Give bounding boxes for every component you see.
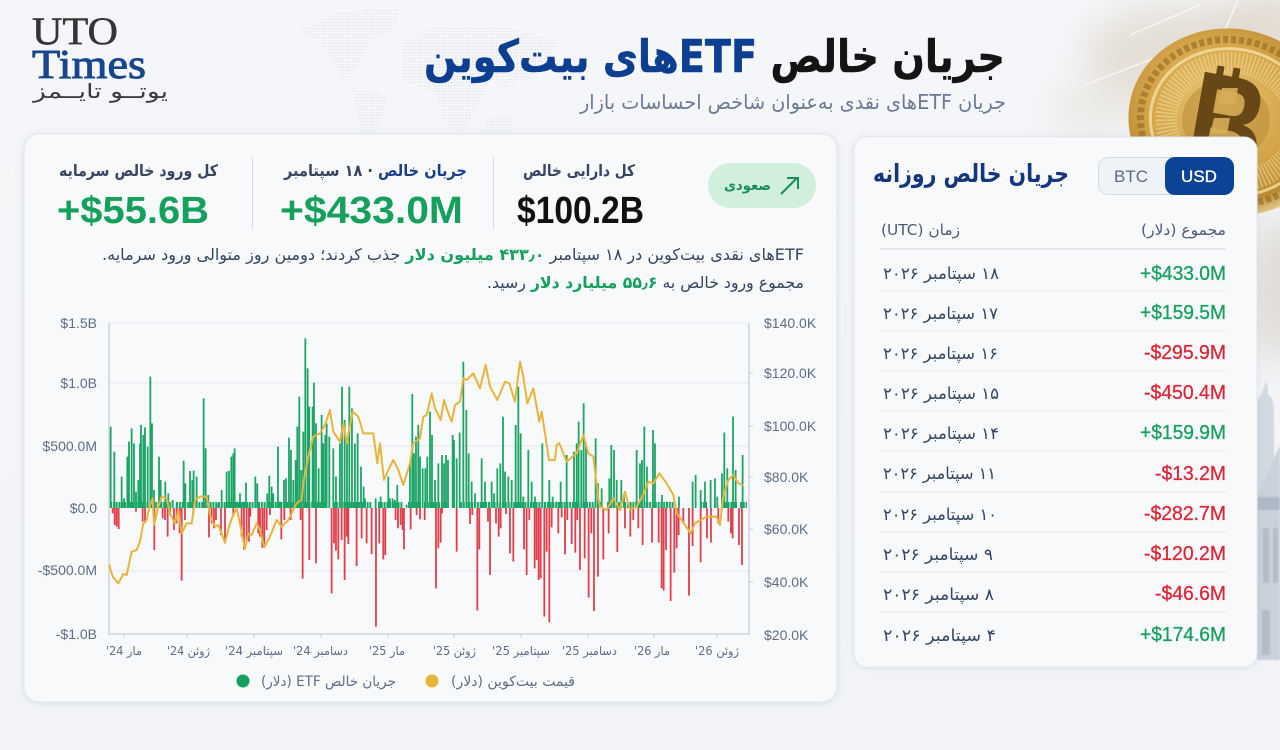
table header [880, 221, 1226, 249]
left axis labels: -$1.0B [56, 626, 97, 642]
row: 17 September: ۱۷ سپتامبر ۲۰۲۶ [883, 304, 998, 324]
row: 9 September: -$120.2M [1144, 543, 1226, 565]
background: world map [300, 8, 560, 146]
stat: total net assets [517, 161, 644, 232]
x axis labels: ژوئن ‎'25 [433, 644, 476, 659]
row: 11 September: ۱۱ سپتامبر ۲۰۲۶ [883, 464, 996, 484]
row: 16 September: ۱۶ سپتامبر ۲۰۲۶ [883, 344, 998, 364]
logo: UTO [32, 10, 118, 53]
toggle: currency: BTC [1114, 167, 1148, 186]
stat: total net inflow [57, 161, 219, 232]
row: 8 September: -$46.6M [1155, 583, 1226, 605]
right axis labels: $100.0K [764, 418, 817, 434]
row: 4 September: +$174.6M [1140, 624, 1226, 646]
description text: مجموع ورود خالص به ۵۵٫۶ میلیارد دلار رسید. [487, 273, 804, 293]
left axis labels [38, 315, 97, 642]
right axis labels: $60.0K [764, 521, 809, 537]
x axis labels: مار ‎'26 [634, 644, 670, 659]
row: 16 September: -$295.9M [1144, 342, 1226, 364]
bitcoin price line [109, 362, 743, 583]
row: 8 September: ۸ سپتامبر ۲۰۲۶ [883, 585, 994, 605]
red outflow bars [113, 508, 742, 627]
title: جریان خالص ETFهای بیت‌کوین [424, 30, 1005, 83]
background: marble texture [1050, 0, 1280, 365]
green inflow bars [110, 338, 747, 508]
row: 9 September: ۹ سپتامبر ۲۰۲۶ [883, 545, 993, 565]
stat: total net assets: $100.2B [517, 190, 644, 232]
row: 4 September [883, 624, 1226, 646]
row: 15 September [883, 382, 1226, 404]
left axis labels: $0.0 [70, 500, 97, 516]
row: 14 September [883, 422, 1226, 444]
right axis labels: $20.0K [764, 627, 809, 643]
x axis labels: دسامبر ‎'25 [562, 644, 617, 659]
row: 8 September [883, 583, 1226, 605]
row: 17 September [883, 302, 1226, 324]
table header: زمان (UTC) [881, 221, 960, 239]
description text [102, 245, 804, 293]
x axis labels: ژوئن ‎'26 [695, 644, 739, 659]
logo: یوتــو تایــمز [32, 79, 168, 103]
stat: net flow 18 September: جریان خالص · ۱۸ سپتامبر [283, 161, 467, 181]
left axis labels: $1.0B [60, 375, 97, 391]
right axis labels: $120.0K [764, 365, 817, 381]
x axis labels: مار ‎'24 [106, 644, 142, 659]
x axis labels: سپتامبر ‎'25 [492, 644, 550, 659]
table header: مجموع (دلار) [1141, 221, 1226, 239]
row: 17 September: +$159.5M [1140, 302, 1226, 324]
row: 18 September [883, 263, 1226, 285]
left axis labels: $500.0M [43, 438, 97, 454]
row: 16 September [883, 342, 1226, 364]
left axis labels: -$500.0M [38, 562, 97, 578]
logo: Times [32, 41, 146, 87]
chart: ETF net flow and bitcoin price [38, 315, 817, 659]
stat: net flow 18 September [280, 161, 467, 232]
row: 11 September [883, 463, 1226, 485]
right axis labels [764, 315, 817, 643]
badge: bullish: صعودی [724, 178, 771, 194]
chart legend [236, 674, 575, 690]
stat: total net inflow: +$55.6B [57, 190, 209, 232]
chart legend: جریان خالص ETF (دلار) [261, 674, 396, 690]
x axis labels: دسامبر ‎'24 [293, 644, 348, 659]
right axis labels: $80.0K [764, 469, 809, 485]
toggle: currency: USD [1181, 167, 1217, 186]
panel: daily net flow table [854, 137, 1257, 667]
logo [32, 10, 168, 103]
row: 18 September: +$433.0M [1140, 263, 1226, 285]
background: cathedral building [1257, 380, 1280, 660]
row: 10 September [883, 503, 1226, 525]
row: 10 September: ۱۰ سپتامبر ۲۰۲۶ [883, 505, 997, 525]
background: bitcoin coin [1111, 9, 1280, 235]
toggle: currency [1098, 157, 1234, 195]
right axis labels: $40.0K [764, 574, 809, 590]
left axis labels: $1.5B [60, 315, 97, 331]
badge: bullish [708, 163, 816, 208]
x axis labels: سپتامبر ‎'24 [225, 644, 283, 659]
chart legend: قیمت بیت‌کوین (دلار) [451, 674, 575, 690]
stat: total net inflow: کل ورود خالص سرمایه [59, 161, 219, 180]
subtitle: جریان ETFهای نقدی به‌عنوان شاخص احساسات بازار [579, 90, 1006, 114]
row: 14 September: +$159.9M [1140, 422, 1226, 444]
panel: overview and chart [24, 134, 837, 702]
row: 4 September: ۴ سپتامبر ۲۰۲۶ [883, 626, 996, 646]
stat: net flow 18 September: +$433.0M [280, 190, 463, 232]
description text: ETFهای نقدی بیت‌کوین در ۱۸ سپتامبر ۴۳۳٫۰ میلیون دلار جذب کردند؛ دومین روز متوالی ورود سرمایه. [102, 245, 804, 265]
row: 15 September: ۱۵ سپتامبر ۲۰۲۶ [883, 384, 999, 404]
x axis labels: ژوئن ‎'24 [167, 644, 210, 659]
row: 11 September: -$13.2M [1155, 463, 1226, 485]
right axis labels: $140.0K [764, 315, 817, 331]
row: 14 September: ۱۴ سپتامبر ۲۰۲۶ [883, 424, 999, 444]
panel heading: جریان خالص روزانه [873, 159, 1069, 189]
row: 18 September: ۱۸ سپتامبر ۲۰۲۶ [883, 264, 999, 284]
x axis labels [106, 644, 739, 659]
row: 15 September: -$450.4M [1144, 382, 1226, 404]
stat: total net assets: کل دارایی خالص [523, 161, 636, 180]
row: 9 September [883, 543, 1226, 565]
row: 10 September: -$282.7M [1144, 503, 1226, 525]
x axis labels: مار ‎'25 [369, 644, 405, 659]
